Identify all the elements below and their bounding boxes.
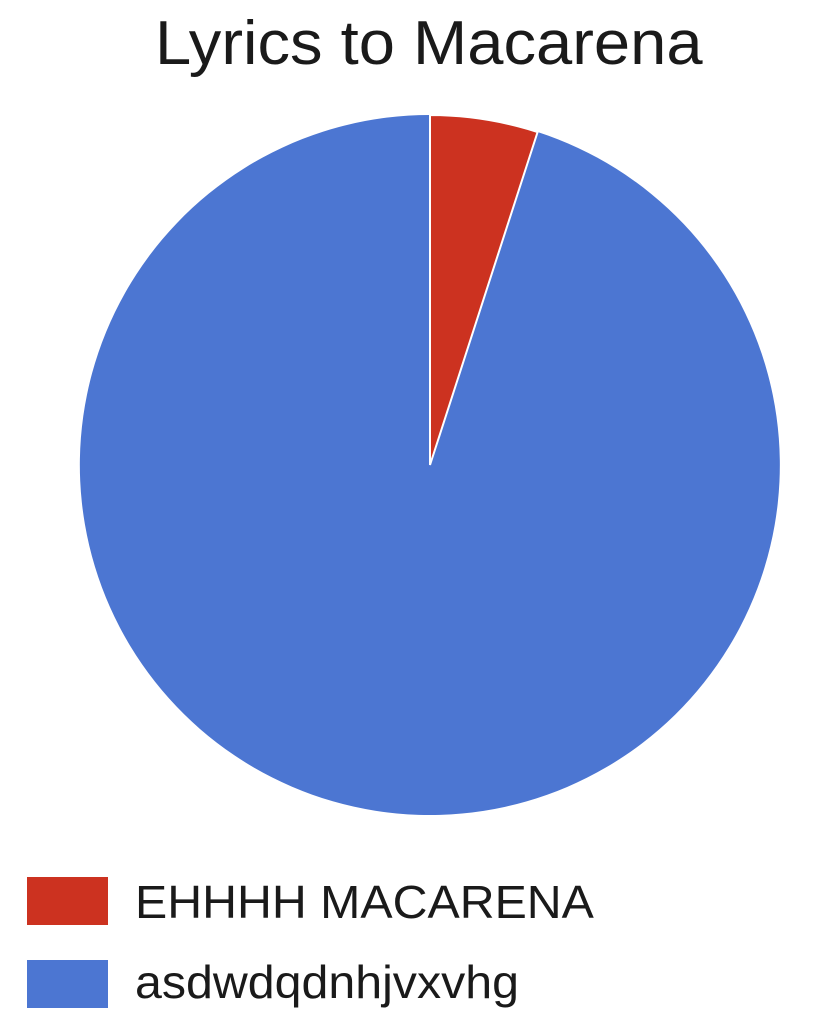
legend label: EHHHH MACARENA: EHHHH MACARENA <box>135 876 594 928</box>
legend swatch: blue <box>27 960 108 1008</box>
slice: asdwdqdnhjvxvhg <box>80 115 780 815</box>
slice: EHHHH MACARENA <box>430 115 538 465</box>
legend label: asdwdqdnhjvxvhg: asdwdqdnhjvxvhg <box>135 956 519 1008</box>
legend <box>27 876 594 1008</box>
legend swatch: red <box>27 877 108 925</box>
title: Lyrics to Macarena <box>155 9 703 78</box>
